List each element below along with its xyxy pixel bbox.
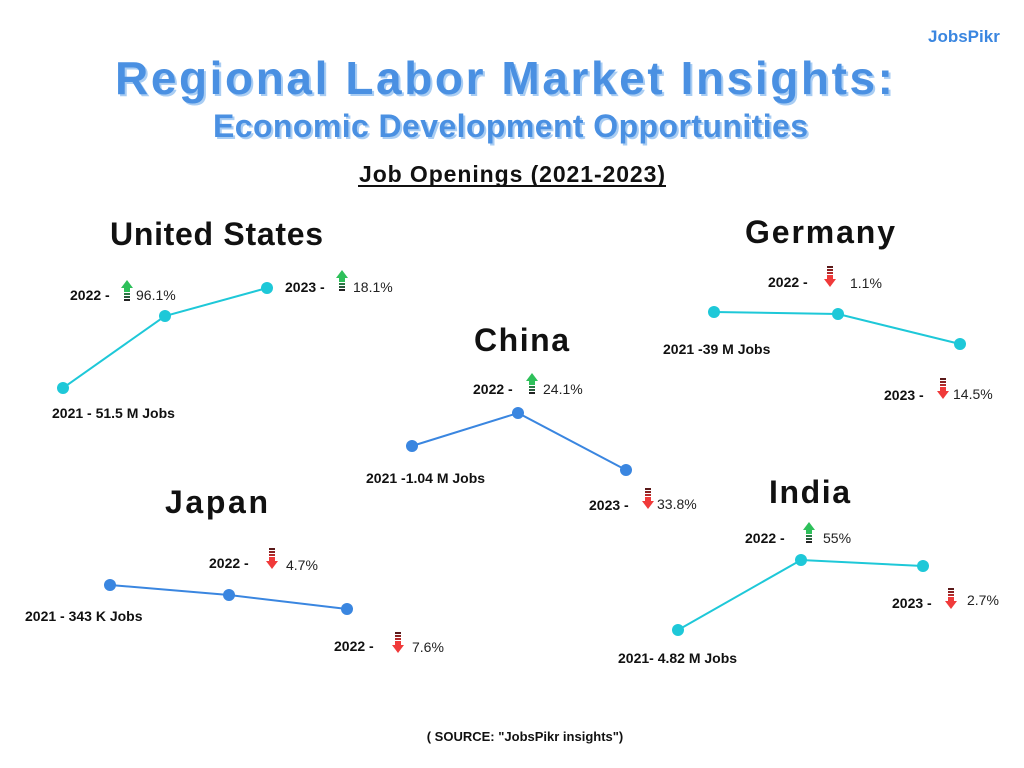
panel: United States: United States: [110, 216, 323, 252]
panel: Japan: 2022 -: [209, 555, 249, 571]
panel: India: 2023 -: [892, 595, 932, 611]
panel: China: China: [474, 322, 569, 358]
panel: Japan: 2022 -: [334, 638, 374, 654]
panel: Germany: 2023 -: [884, 387, 924, 403]
panel: India: [618, 474, 999, 666]
panel: Japan: 7.6%: [412, 639, 444, 655]
panel: United States: 2021 - 51.5 M Jobs: [52, 405, 175, 421]
panel: India: 2.7%: [967, 592, 999, 608]
panel: United States: 18.1%: [353, 279, 393, 295]
panel: Germany: 2021 -39 M Jobs: [663, 341, 771, 357]
panel: India: 55%: [823, 530, 851, 546]
panel: India: India: [769, 474, 850, 510]
panel: India: 2022 -: [745, 530, 785, 546]
panel: United States: 2022 -: [70, 287, 110, 303]
panel: China: 24.1%: [543, 381, 583, 397]
subtitle: Economic Development Opportunities: [213, 108, 808, 144]
panel: China: 2023 -: [589, 497, 629, 513]
panel: India: 2021- 4.82 M Jobs: [618, 650, 737, 666]
logo: JobsPikr: [928, 27, 1000, 46]
panel: Germany: 1.1%: [850, 275, 882, 291]
chart heading: Job Openings (2021-2023): [359, 161, 665, 187]
panel: United States: [52, 216, 393, 421]
title: Regional Labor Market Insights:: [117, 54, 895, 106]
panel: Germany: [663, 214, 993, 403]
panel: United States: 2023 -: [285, 279, 325, 295]
panel: Japan: 4.7%: [286, 557, 318, 573]
panel: China: 2021 -1.04 M Jobs: [366, 470, 485, 486]
panel: Germany: Germany: [745, 214, 895, 250]
panel: United States: 96.1%: [136, 287, 176, 303]
source note: ( SOURCE: "JobsPikr insights"): [427, 729, 623, 744]
panel: Germany: 2022 -: [768, 274, 808, 290]
panel: China: 2022 -: [473, 381, 513, 397]
panel: Japan: Japan: [165, 484, 268, 520]
subtitle: Economic Development Opportunities: [215, 110, 810, 146]
panel: China: 33.8%: [657, 496, 697, 512]
panel: Germany: 14.5%: [953, 386, 993, 402]
title: Regional Labor Market Insights:: [115, 52, 893, 104]
panel: Japan: 2021 - 343 K Jobs: [25, 608, 143, 624]
panel: Japan: [25, 484, 444, 655]
panel: China: [366, 322, 697, 513]
